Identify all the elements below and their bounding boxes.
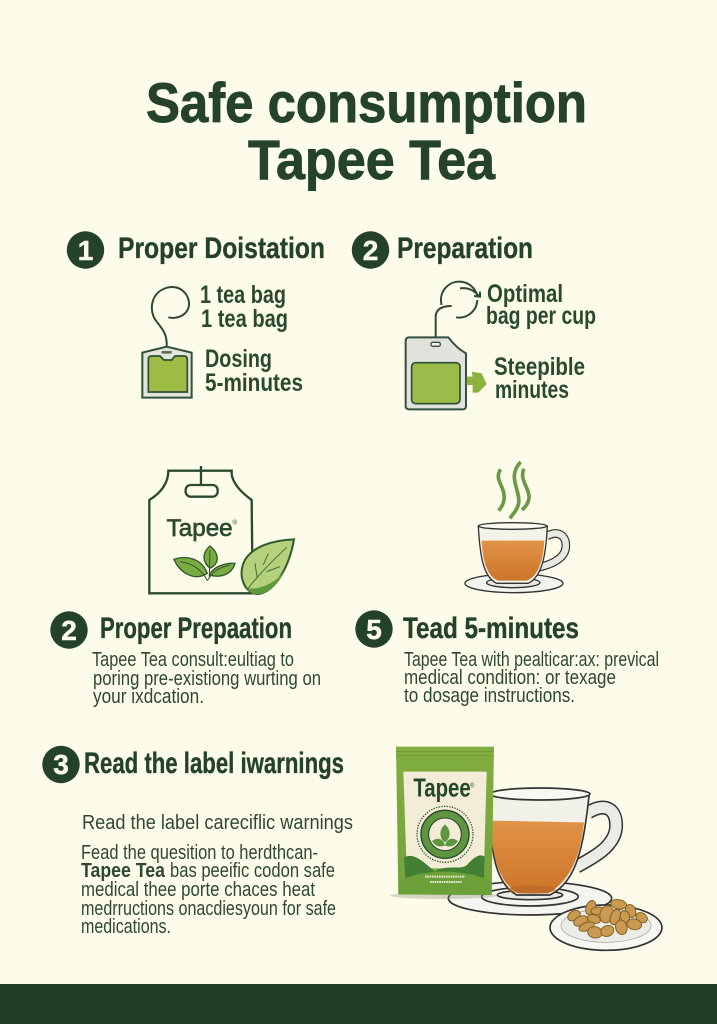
body text: bas peeific codon safe bbox=[170, 860, 335, 882]
footer band bbox=[0, 984, 717, 1024]
number badge 3 bbox=[42, 746, 80, 783]
body text: medications. bbox=[81, 916, 171, 938]
number badge 2: 2 bbox=[61, 615, 77, 646]
number badge 2 bbox=[50, 611, 88, 649]
body text: your ixdcation. bbox=[93, 686, 204, 708]
panel: preparation bbox=[352, 231, 596, 409]
dosing text: 1 tea bag bbox=[201, 305, 288, 333]
body text: to dosage instructions. bbox=[404, 685, 575, 707]
body text: poring pre-existiong wurting on bbox=[93, 668, 321, 690]
number badge 1 bbox=[67, 231, 104, 269]
body text bbox=[92, 649, 321, 708]
title bbox=[146, 71, 587, 191]
body text: Tapee Tea with pealticar:ax: prevical bbox=[404, 649, 659, 671]
package: tapee: ® bbox=[470, 783, 475, 790]
panel: tead 5-minutes bbox=[355, 610, 659, 707]
number badge 3: 3 bbox=[53, 749, 69, 780]
subheading: Read the label careciflic warnings bbox=[82, 812, 353, 834]
icon: tapee tea bag with leaves: ® bbox=[232, 519, 237, 527]
large cup of tea bbox=[490, 788, 616, 895]
number badge 5: 5 bbox=[366, 614, 382, 645]
icon: tapee tea bag with leaves: Tapee bbox=[167, 515, 233, 542]
plate of tapee nuts bbox=[550, 898, 662, 950]
title: Tapee Tea bbox=[248, 128, 496, 191]
package: tapee bbox=[390, 747, 497, 899]
number badge 1: 1 bbox=[78, 235, 93, 266]
preparation text: Optimal bbox=[487, 280, 563, 308]
body text bbox=[404, 649, 659, 707]
package: tapee: Tapee bbox=[413, 773, 471, 803]
number badge 2 bbox=[352, 231, 389, 269]
panel: proper preparation bbox=[50, 611, 321, 708]
icon: tea bag with curled string bbox=[142, 287, 192, 398]
preparation text bbox=[486, 280, 596, 404]
body text: medical thee porte chaces heat bbox=[81, 879, 315, 901]
dosing text bbox=[200, 281, 303, 397]
body text: Tapee Tea bbox=[81, 860, 166, 882]
preparation text: Steepible bbox=[494, 353, 585, 381]
panel: proper dosing bbox=[67, 231, 325, 398]
body text: medical condition: or texage bbox=[404, 667, 616, 689]
title: Safe consumption bbox=[146, 71, 587, 134]
dosing text: 1 tea bag bbox=[200, 281, 286, 309]
heading: proper doistation: Proper Doistation bbox=[118, 232, 325, 265]
preparation text: minutes bbox=[495, 376, 569, 404]
body text: Fead the quesition to herdthcan- bbox=[81, 842, 318, 864]
dosing text: 5-minutes bbox=[205, 369, 303, 397]
heading: preparation: Preparation bbox=[397, 232, 533, 265]
heading: proper prepaation: Proper Prepaation bbox=[100, 612, 292, 645]
large saucer bbox=[448, 882, 612, 915]
body text: medrructions onacdiesyoun for safe bbox=[81, 898, 336, 920]
panel: read the label bbox=[42, 746, 353, 938]
heading: read the label iwarnings: Read the label iwarnings bbox=[84, 747, 344, 780]
icon: small cup of tea with steam bbox=[465, 462, 566, 593]
icon: tea bag with loop and arrow bbox=[406, 282, 487, 409]
illustration: package, cup and plate of tapee bbox=[390, 747, 662, 950]
preparation text: bag per cup bbox=[486, 302, 596, 330]
heading: tead 5-minutes: Tead 5-minutes bbox=[403, 612, 579, 645]
body text: Tapee Tea consult:eultiag to bbox=[92, 649, 294, 671]
body text bbox=[81, 842, 336, 938]
dosing text: Dosing bbox=[205, 345, 272, 373]
number badge 5 bbox=[355, 610, 393, 648]
icon: tapee tea bag with leaves bbox=[149, 466, 294, 594]
number badge 2: 2 bbox=[363, 235, 378, 266]
